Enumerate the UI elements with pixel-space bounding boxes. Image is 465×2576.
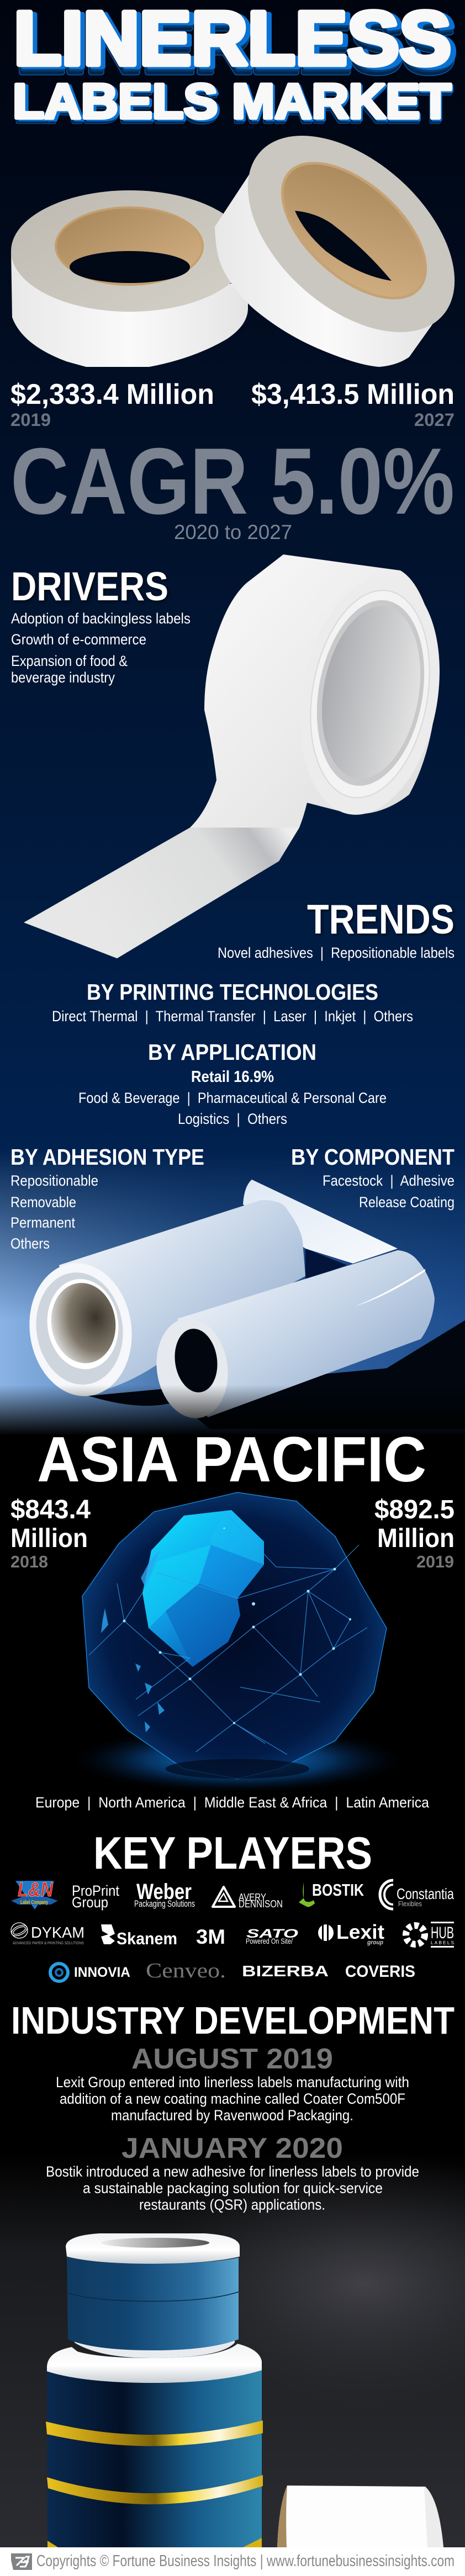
logo: ProPrint: [72, 1882, 119, 1911]
logo: Dykam: DYKAM: [31, 1924, 84, 1941]
title line: LABELS MARKET: LABELS MARKET: [14, 77, 451, 132]
region value 2019: Million: [377, 1524, 455, 1553]
shadow below rolls: [88, 1320, 465, 1429]
logo: Constantia: Flexibles: [398, 1900, 422, 1908]
panel: drivers: DRIVERS: [11, 564, 168, 609]
panel: by printing technologies: Direct Thermal | Thermal Transfer | Laser | Inkjet | Others: [52, 1008, 413, 1025]
title line: LINERLESS: LINERLESS: [18, 0, 457, 83]
left roll: [11, 190, 249, 367]
logo: Skanem: [101, 1924, 177, 1948]
other regions: Europe | North America | Middle East & Africa | Latin America: [35, 1794, 430, 1811]
panel: by printing technologies: BY PRINTING TECHNOLOGIES: [87, 979, 378, 1005]
region value 2018: Million: [10, 1524, 88, 1553]
title line: LABELS MARKET: LABELS MARKET: [16, 75, 452, 130]
development: August 2019: AUGUST 2019: [131, 2043, 333, 2075]
development: August 2019: Lexit Group entered into linerless labels manufacturing with: [56, 2074, 409, 2090]
development: August 2019: addition of a new coating machine called Coater Com500F: [60, 2090, 405, 2107]
logo: Lexit: group: [367, 1939, 383, 1946]
title line: LABELS MARKET: LABELS MARKET: [13, 73, 451, 129]
highlight streak: [355, 1269, 425, 1306]
region value 2019: [374, 1495, 455, 1571]
panel: by printing technologies: [52, 979, 413, 1025]
panel: by application: Food & Beverage | Pharmaceutical & Personal Care: [78, 1090, 387, 1106]
development: January 2020: [46, 2132, 419, 2213]
panel: by adhesion type: Removable: [10, 1194, 76, 1210]
panel: drivers: Growth of e-commerce: [11, 631, 146, 648]
development: January 2020: JANUARY 2020: [121, 2132, 343, 2164]
title line: LINERLESS: LINERLESS: [17, 4, 455, 89]
title line: LINERLESS: LINERLESS: [18, 1, 456, 86]
development: August 2019: [56, 2043, 409, 2124]
logo: Lexit: [318, 1921, 384, 1946]
title line: LINERLESS: LINERLESS: [17, 4, 455, 89]
logo: Hub Labels: LABELS: [431, 1940, 454, 1945]
logo: SATO: [246, 1927, 298, 1945]
market value 2019: 2019: [10, 410, 51, 430]
logo: Skanem: Skanem: [117, 1929, 177, 1948]
panel: by application: Logistics | Others: [178, 1111, 287, 1127]
logo: Avery Dennison: DENNISON: [239, 1898, 283, 1910]
market value 2027: [251, 378, 455, 430]
panel: by adhesion type: Permanent: [10, 1214, 75, 1231]
small white roll: [277, 2486, 443, 2547]
title line: LABELS MARKET: LABELS MARKET: [14, 77, 451, 132]
region value 2018: [10, 1495, 91, 1571]
logo: Innovia: INNOVIA: [74, 1965, 130, 1980]
illustration: digital globe: [72, 1492, 403, 1793]
panel: drivers: [11, 564, 191, 686]
development: January 2020: restaurants (QSR) applications.: [139, 2196, 325, 2213]
upper jar: [66, 2233, 240, 2358]
back sheet: [243, 1180, 398, 1263]
fade to black: [0, 1385, 465, 1436]
logo: SATO: Powered On Site/: [246, 1937, 293, 1945]
logo: Hub Labels: HUB: [431, 1924, 454, 1942]
panel: by adhesion type: BY ADHESION TYPE: [10, 1144, 204, 1170]
lower jar: [46, 2344, 263, 2547]
logo: Lexit: Lexit: [336, 1921, 384, 1943]
market value 2019: $2,333.4 Million: [10, 378, 214, 410]
icon: Fortune Business Insights logo: [11, 2553, 32, 2570]
logo: Avery Dennison: [213, 1887, 283, 1910]
region value 2018: 2018: [10, 1552, 48, 1571]
logo: Hub Labels: [406, 1922, 454, 1948]
panel: by application: BY APPLICATION: [148, 1039, 316, 1065]
panel: drivers: beverage industry: [11, 669, 115, 686]
logo: Avery Dennison: AVERY: [239, 1892, 266, 1903]
logo: L&N: Label Company: [20, 1900, 48, 1906]
logo: SATO: SATO: [246, 1927, 298, 1940]
big roll: [21, 1200, 305, 1403]
logo: Coveris: COVERIS: [345, 1962, 415, 1981]
logo: Dykam: [10, 1923, 84, 1945]
panel: by application: Retail 16.9%: [191, 1068, 274, 1086]
panel: by adhesion type: Others: [10, 1235, 50, 1252]
development: August 2019: manufactured by Ravenwood Packaging.: [111, 2107, 353, 2124]
right roll: [212, 98, 465, 370]
logo: Cenveo: Cenveo.: [146, 1959, 226, 1982]
illustration: two white film rolls: [21, 1180, 465, 1429]
illustration: unrolling tape: [24, 554, 457, 958]
panel: by adhesion type: [10, 1144, 204, 1252]
market value 2019: [10, 378, 214, 430]
development: January 2020: Bostik introduced a new adhesive for linerless labels to provide: [46, 2163, 419, 2180]
logo: Dykam: ADVANCED PAPER & PRINTING SOLUTIONS: [13, 1942, 84, 1945]
footer bar: [0, 2547, 465, 2576]
region value 2019: 2019: [416, 1552, 454, 1571]
heading: Asia Pacific: ASIA PACIFIC: [37, 1423, 426, 1495]
logo: Weber: Weber: [136, 1880, 192, 1904]
CAGR: 2020 to 2027: [174, 521, 292, 543]
title: [13, 0, 457, 132]
logo: L&N: L&N: [18, 1878, 54, 1901]
illustration: stacked blue rolls: [46, 2233, 443, 2547]
logo: Weber: Packaging Solutions: [134, 1898, 195, 1909]
region value 2019: $892.5: [374, 1495, 455, 1524]
panel: drivers: Adoption of backingless labels: [11, 610, 191, 627]
panel: by component: [291, 1144, 455, 1210]
market value 2027: $3,413.5 Million: [251, 378, 455, 410]
panel: drivers: Expansion of food &: [11, 653, 128, 669]
key player logos: [10, 1878, 454, 1982]
region value 2018: $843.4: [10, 1495, 91, 1524]
panel: trends: [218, 896, 455, 961]
logo: ProPrint: ProPrint: [72, 1882, 119, 1899]
logo: L&N: [11, 1878, 58, 1910]
panel: by adhesion type: Repositionable: [10, 1172, 98, 1189]
logo: Constantia: [380, 1880, 454, 1909]
illustration: two white label rolls: [11, 98, 465, 370]
logo: Bostik: [299, 1880, 364, 1907]
logo: ProPrint: Group: [72, 1894, 108, 1911]
front roll: [150, 1250, 435, 1423]
panel: by application: [78, 1039, 387, 1127]
logo: Bizerba: BIZERBA: [242, 1962, 329, 1980]
logo: Innovia: [50, 1964, 130, 1981]
heading: key players: KEY PLAYERS: [93, 1827, 372, 1879]
market value 2027: 2027: [414, 410, 455, 430]
logo: Bostik: BOSTIK: [312, 1880, 364, 1900]
development: January 2020: a sustainable packaging solution for quick-service: [83, 2180, 383, 2196]
logo: 3M: 3M: [196, 1926, 225, 1948]
